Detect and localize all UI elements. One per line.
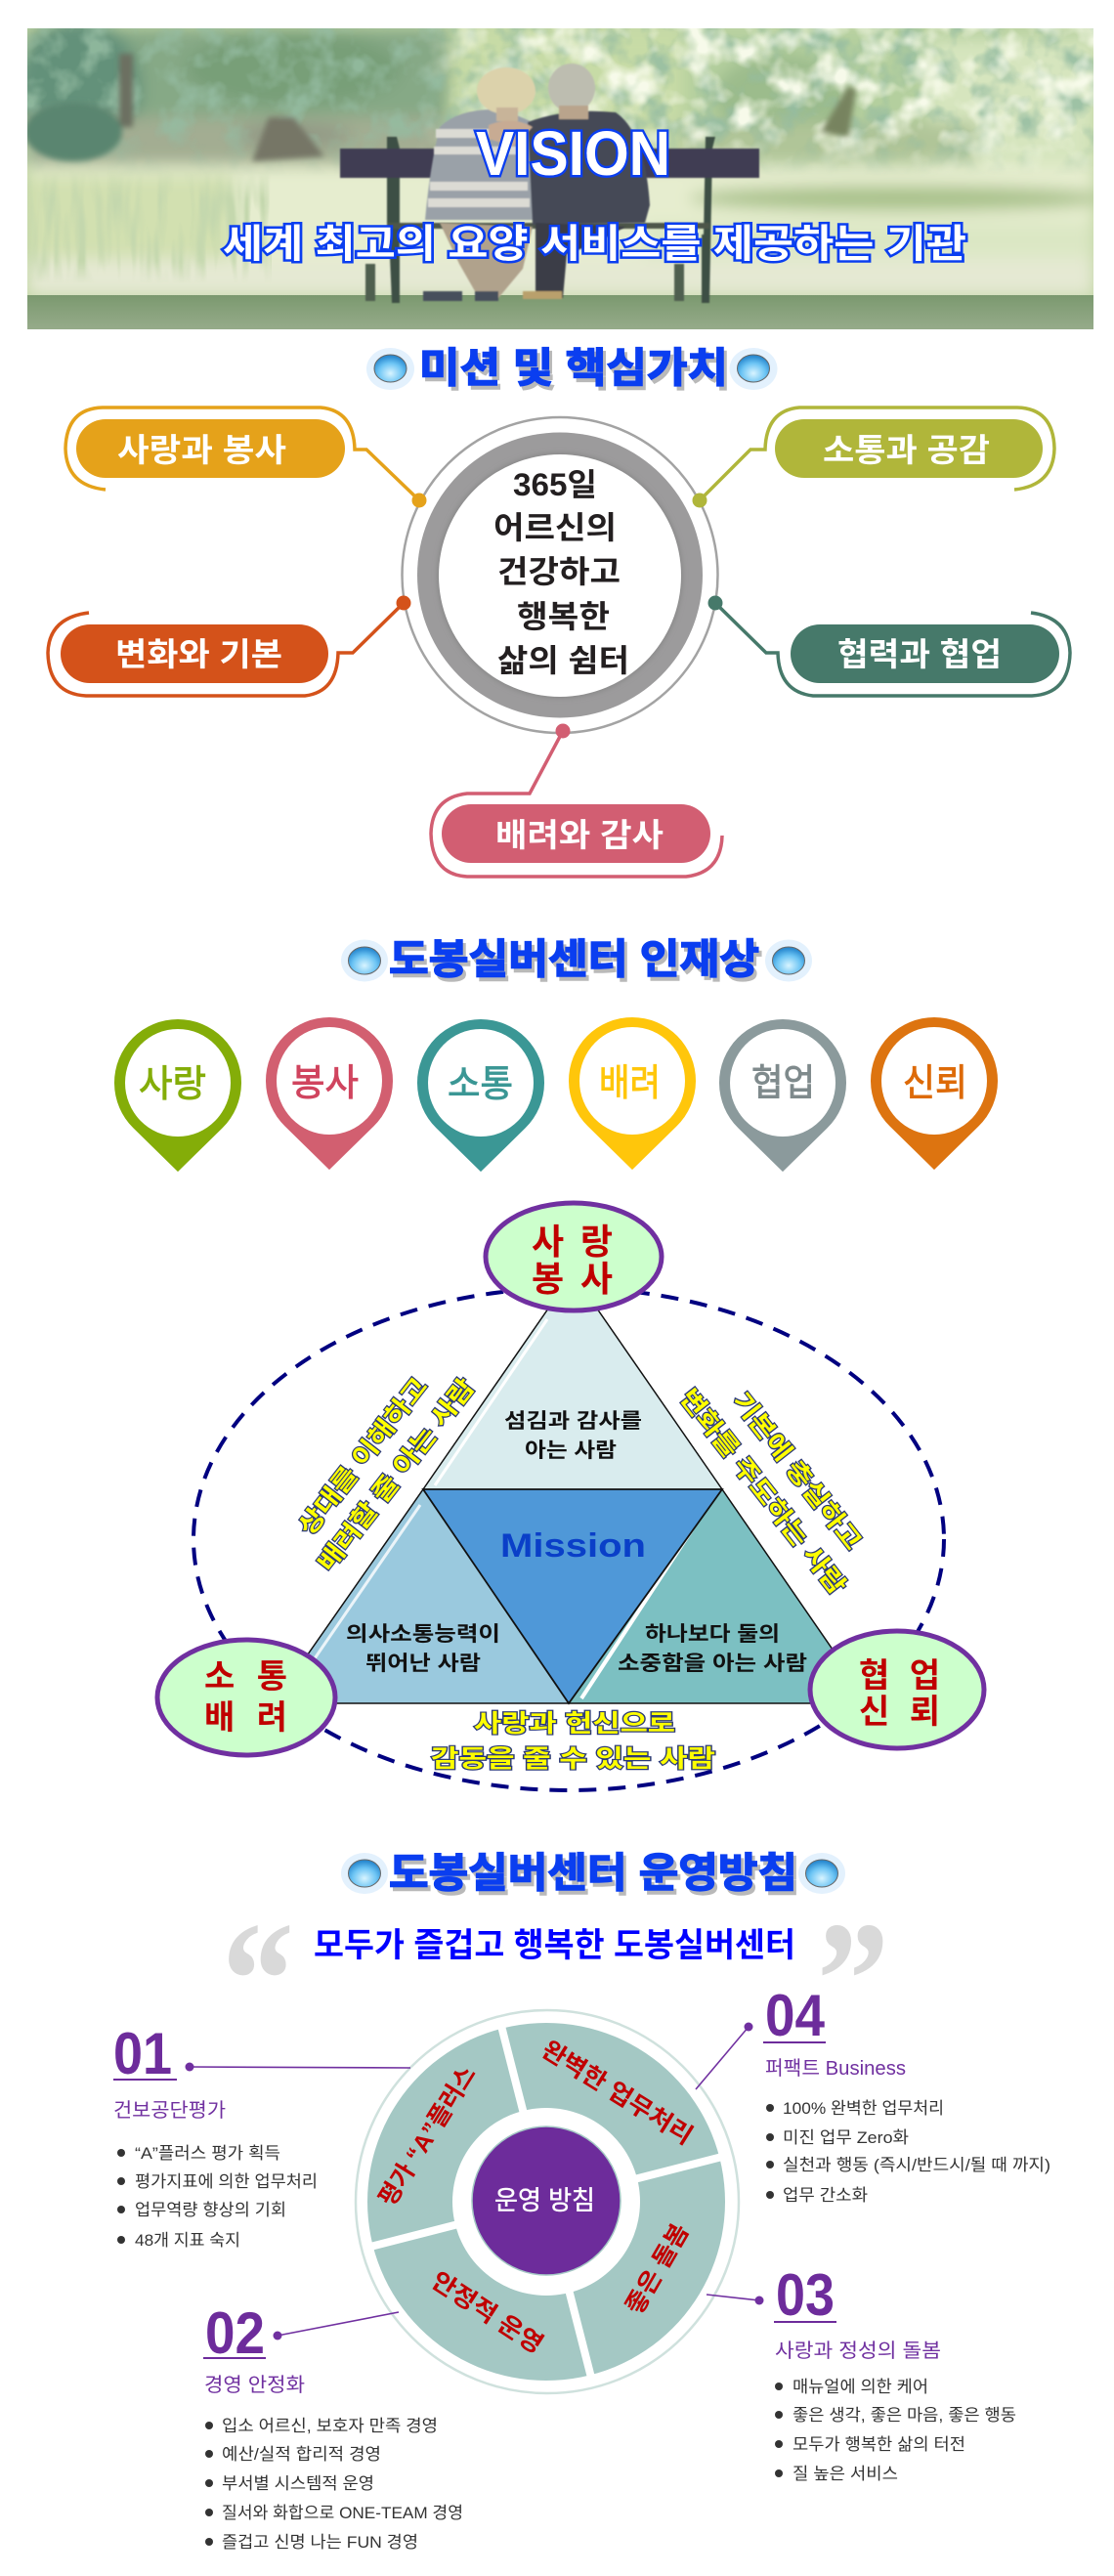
- block 03: 03: [776, 2262, 835, 2328]
- value: love and service: 사랑과 봉사: [117, 432, 286, 468]
- pin: communication: [417, 1019, 544, 1172]
- bottom label: 사랑과 헌신으로: [474, 1710, 675, 1738]
- value: consideration and gratitude: [431, 723, 722, 877]
- pin: love: 사랑: [139, 1064, 206, 1105]
- center circle: 행복한: [517, 599, 610, 634]
- triangle: communication: 뛰어난 사람: [365, 1653, 481, 1675]
- heading: operating policy: 도봉실버센터 운영방침: [389, 1850, 797, 1896]
- panel: vision banner: [15, 20, 1109, 329]
- heading: mission: 미션 및 핵심가치: [419, 345, 728, 391]
- block 04: [696, 1983, 1050, 2205]
- dashed ring: [193, 1288, 944, 1790]
- block 01: 평가지표에 의한 업무처리: [135, 2172, 318, 2191]
- block 04: 실천과 행동 (즉시/반드시/될 때 까지): [783, 2156, 1050, 2174]
- center circle: 365일: [513, 467, 597, 502]
- block 02: 부서별 시스템적 운영: [222, 2474, 374, 2493]
- side label: left: 배려할 줄 아는 사람: [313, 1374, 480, 1577]
- triangle: together: [569, 1489, 870, 1703]
- node: cooperation trust: 신 뢰: [859, 1694, 940, 1731]
- triangle: communication: [274, 1489, 569, 1703]
- side label: left: [293, 1373, 480, 1577]
- vision title: VISION: [476, 118, 670, 189]
- node: love service: [486, 1203, 662, 1310]
- block 02: 예산/실적 합리적 경영: [222, 2445, 381, 2464]
- pin: service: 봉사: [291, 1063, 359, 1104]
- triangle: together: 하나보다 둘의: [645, 1623, 780, 1646]
- pin: consideration: 배려: [599, 1063, 661, 1104]
- block 02: [203, 2300, 463, 2552]
- pin: trust: [871, 1017, 998, 1170]
- panel: mission triangle diagram: [157, 1203, 984, 1790]
- node: love service: 봉 사: [532, 1259, 613, 1299]
- pin: cooperation: 협업: [751, 1063, 815, 1104]
- wheel: 평가 “A”플러스: [374, 2061, 482, 2211]
- panel: mission and core values: [48, 345, 1070, 877]
- wheel: 완벽한 업무처리: [536, 2036, 698, 2150]
- value: cooperation: [707, 596, 1070, 696]
- pin: service: [266, 1017, 393, 1170]
- block 01: 업무역량 향상의 기회: [135, 2201, 286, 2219]
- block 01: [113, 2021, 410, 2250]
- block 03: 질 높은 서비스: [793, 2465, 898, 2483]
- bottom label: 감동을 줄 수 있는 사람: [431, 1745, 715, 1773]
- value: cooperation: 협력과 협업: [837, 636, 1002, 672]
- pin: love: [114, 1019, 241, 1172]
- block 04: 100% 완벽한 업무처리: [783, 2099, 944, 2118]
- pin: consideration: [569, 1017, 696, 1170]
- triangle: serve and thank: [423, 1273, 722, 1489]
- heading: mission: [366, 345, 778, 391]
- bench: [340, 137, 759, 303]
- node: cooperation trust: [810, 1631, 984, 1748]
- couple: [423, 64, 650, 301]
- side label: right: 기본에 충실하고: [727, 1388, 867, 1555]
- triangle: together: 소중함을 아는 사람: [618, 1653, 807, 1675]
- center circle: 어르신의: [493, 510, 617, 545]
- photo: elderly couple on bench: [15, 20, 1109, 329]
- center circle: 건강하고: [497, 554, 621, 589]
- block 02: 질서와 화합으로 ONE-TEAM 경영: [222, 2504, 463, 2522]
- vision statement: 세계 최고의 요양 서비스를 제공하는 기관: [223, 223, 966, 266]
- block 02: 즐겁고 신명 나는 FUN 경영: [222, 2533, 418, 2552]
- triangle: mission: Mission: [500, 1527, 646, 1565]
- slogan: 모두가 즐겁고 행복한 도봉실버센터: [314, 1927, 795, 1964]
- side label: right: 변화를 주도하는 사람: [674, 1384, 851, 1600]
- block 03: 좋은 생각, 좋은 마음, 좋은 행동: [793, 2406, 1016, 2425]
- side label: left: 상대를 이해하고: [293, 1373, 433, 1540]
- center circle: 삶의 쉼터: [497, 643, 629, 678]
- slogan: [222, 1888, 889, 2072]
- value: change and basics: [48, 596, 410, 696]
- block 01: “A”플러스 평가 획득: [135, 2144, 280, 2163]
- panel: talent profile: [114, 936, 998, 1172]
- triangle: serve and thank: 섬김과 감사를: [504, 1410, 642, 1433]
- block 01: 01: [113, 2021, 172, 2086]
- node: communication consideration: 배 려: [204, 1699, 287, 1737]
- pin: communication: 소통: [448, 1064, 513, 1105]
- triangle: communication: 의사소통능력이: [346, 1623, 500, 1646]
- triangle: serve and thank: 아는 사람: [525, 1439, 617, 1462]
- wheel: [356, 2010, 739, 2393]
- center circle: [403, 417, 717, 733]
- slogan: ”: [817, 1888, 889, 2072]
- pin: trust: 신뢰: [903, 1063, 967, 1104]
- value: consideration and gratitude: 배려와 감사: [495, 817, 664, 853]
- node: love service: 사 랑: [532, 1222, 613, 1262]
- block 03: 모두가 행복한 삶의 터전: [793, 2435, 965, 2454]
- block 04: 퍼팩트 Business: [765, 2057, 906, 2080]
- wheel: 좋은 돌봄: [621, 2219, 695, 2319]
- node: cooperation trust: 협 업: [859, 1657, 940, 1695]
- block 03: 매뉴얼에 의한 케어: [793, 2378, 928, 2396]
- value: communication and empathy: [692, 408, 1054, 508]
- block 01: 48개 지표 숙지: [135, 2231, 240, 2250]
- block 02: 02: [205, 2300, 265, 2366]
- panel: operating policy: [113, 1850, 1050, 2552]
- block 04: 업무 간소화: [783, 2186, 868, 2205]
- node: communication consideration: 소 통: [204, 1658, 287, 1696]
- block 03: 사랑과 정성의 돌봄: [775, 2340, 941, 2362]
- slogan: “: [222, 1888, 294, 2072]
- triangle: mission: [423, 1489, 722, 1703]
- bottom label: [431, 1710, 715, 1773]
- value: love and service: [65, 408, 426, 508]
- value: change and basics: 변화와 기본: [115, 636, 282, 672]
- wheel: 운영 방침: [494, 2186, 595, 2215]
- value: communication and empathy: 소통과 공감: [823, 432, 990, 468]
- block 04: 04: [765, 1983, 826, 2048]
- block 04: 미진 업무 Zero화: [783, 2128, 909, 2147]
- pin: cooperation: [719, 1019, 846, 1172]
- heading: talent: 도봉실버센터 인재상: [389, 936, 759, 982]
- block 02: 경영 안정화: [204, 2374, 305, 2396]
- block 01: 건보공단평가: [113, 2099, 226, 2122]
- side label: right: [674, 1384, 867, 1600]
- block 02: 입소 어르신, 보호자 만족 경영: [222, 2417, 438, 2435]
- node: communication consideration: [157, 1640, 335, 1755]
- block 03: [707, 2262, 1016, 2483]
- wheel: 안정적 운영: [426, 2267, 548, 2359]
